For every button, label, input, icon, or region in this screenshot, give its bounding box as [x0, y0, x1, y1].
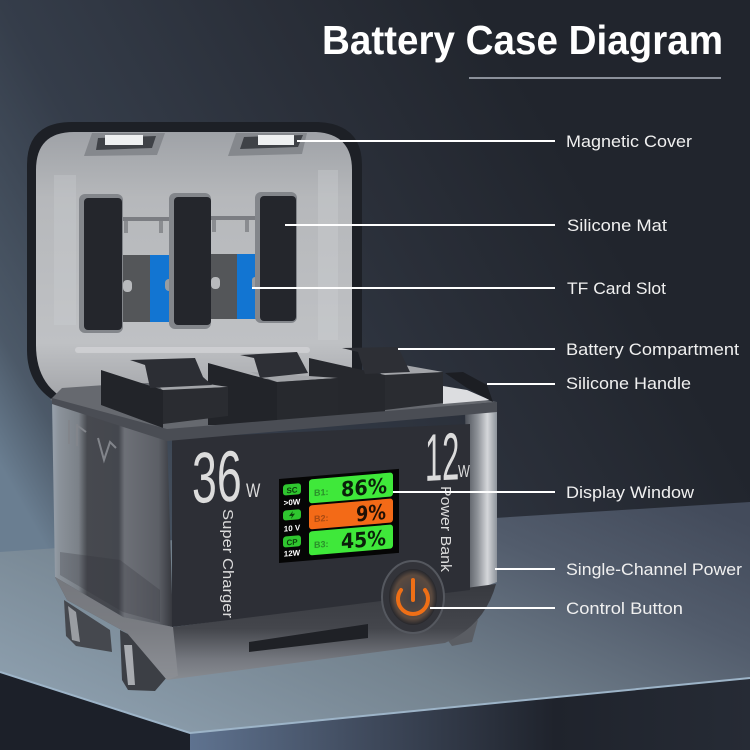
battery 2 level: B2: — [314, 513, 328, 524]
callout: Silicone Mat: Silicone Mat — [567, 216, 667, 235]
case floor inside lid — [50, 376, 497, 432]
silicone handle — [443, 372, 493, 404]
TF cards and rails — [120, 216, 262, 322]
black front panel — [172, 424, 470, 627]
batteries — [101, 347, 493, 428]
CP indicator: 12W — [284, 548, 301, 559]
translucent left face — [52, 400, 173, 627]
base connector — [249, 624, 368, 652]
reflected marks on left face — [69, 420, 116, 460]
silicone mats — [79, 192, 297, 333]
top rim — [52, 398, 497, 441]
SC indicator — [283, 483, 301, 508]
Power Bank label: Power Bank — [437, 486, 454, 573]
callout: Control Button: Control Button — [566, 599, 683, 618]
12W mark: 12 — [425, 420, 459, 496]
36W mark: 36 — [192, 436, 242, 519]
middle battery — [208, 352, 338, 425]
callout: Display Window: Display Window — [566, 483, 695, 502]
base tray — [55, 577, 496, 680]
battery 2 level — [309, 498, 393, 530]
lid — [27, 122, 362, 402]
SC indicator: >0W — [284, 497, 301, 508]
battery 1 level: 86% — [341, 473, 387, 502]
CP indicator — [283, 535, 301, 559]
SC indicator: SC — [286, 485, 298, 495]
callout: Silicone Handle: Silicone Handle — [566, 374, 691, 393]
battery case product — [27, 122, 497, 691]
battery 1 level — [309, 472, 393, 504]
callout: Single-Channel Power: Single-Channel Power — [566, 560, 742, 579]
darker lower reflection on left face — [60, 552, 160, 622]
translucent right edge — [465, 402, 497, 592]
battery 3 level: B3: — [314, 539, 328, 550]
battery 1 level: B1: — [314, 487, 328, 498]
callout: Magnetic Cover: Magnetic Cover — [566, 132, 692, 151]
callout: TF Card Slot: TF Card Slot — [567, 279, 666, 298]
battery 3 level — [309, 524, 393, 556]
table front faces — [0, 672, 750, 750]
translucent lower-left lip — [55, 577, 178, 680]
table top surface — [0, 502, 750, 733]
36W mark: W — [246, 479, 261, 501]
left battery — [101, 358, 228, 428]
callout: Battery Compartment: Battery Compartment — [566, 340, 739, 359]
Super Charger label: Super Charger — [219, 509, 236, 618]
battery 3 level: 45% — [341, 525, 386, 554]
battery 2 level: 9% — [356, 499, 386, 527]
display window — [279, 469, 399, 563]
right battery — [309, 347, 443, 420]
magnets — [84, 133, 307, 156]
CP indicator: CP — [286, 537, 298, 547]
12W mark: W — [458, 462, 470, 482]
title underline — [469, 77, 721, 79]
title: Battery Case Diagram — [322, 17, 723, 63]
voltage indicator: 10 V — [284, 523, 301, 534]
control button — [382, 561, 444, 633]
feet — [64, 600, 478, 691]
